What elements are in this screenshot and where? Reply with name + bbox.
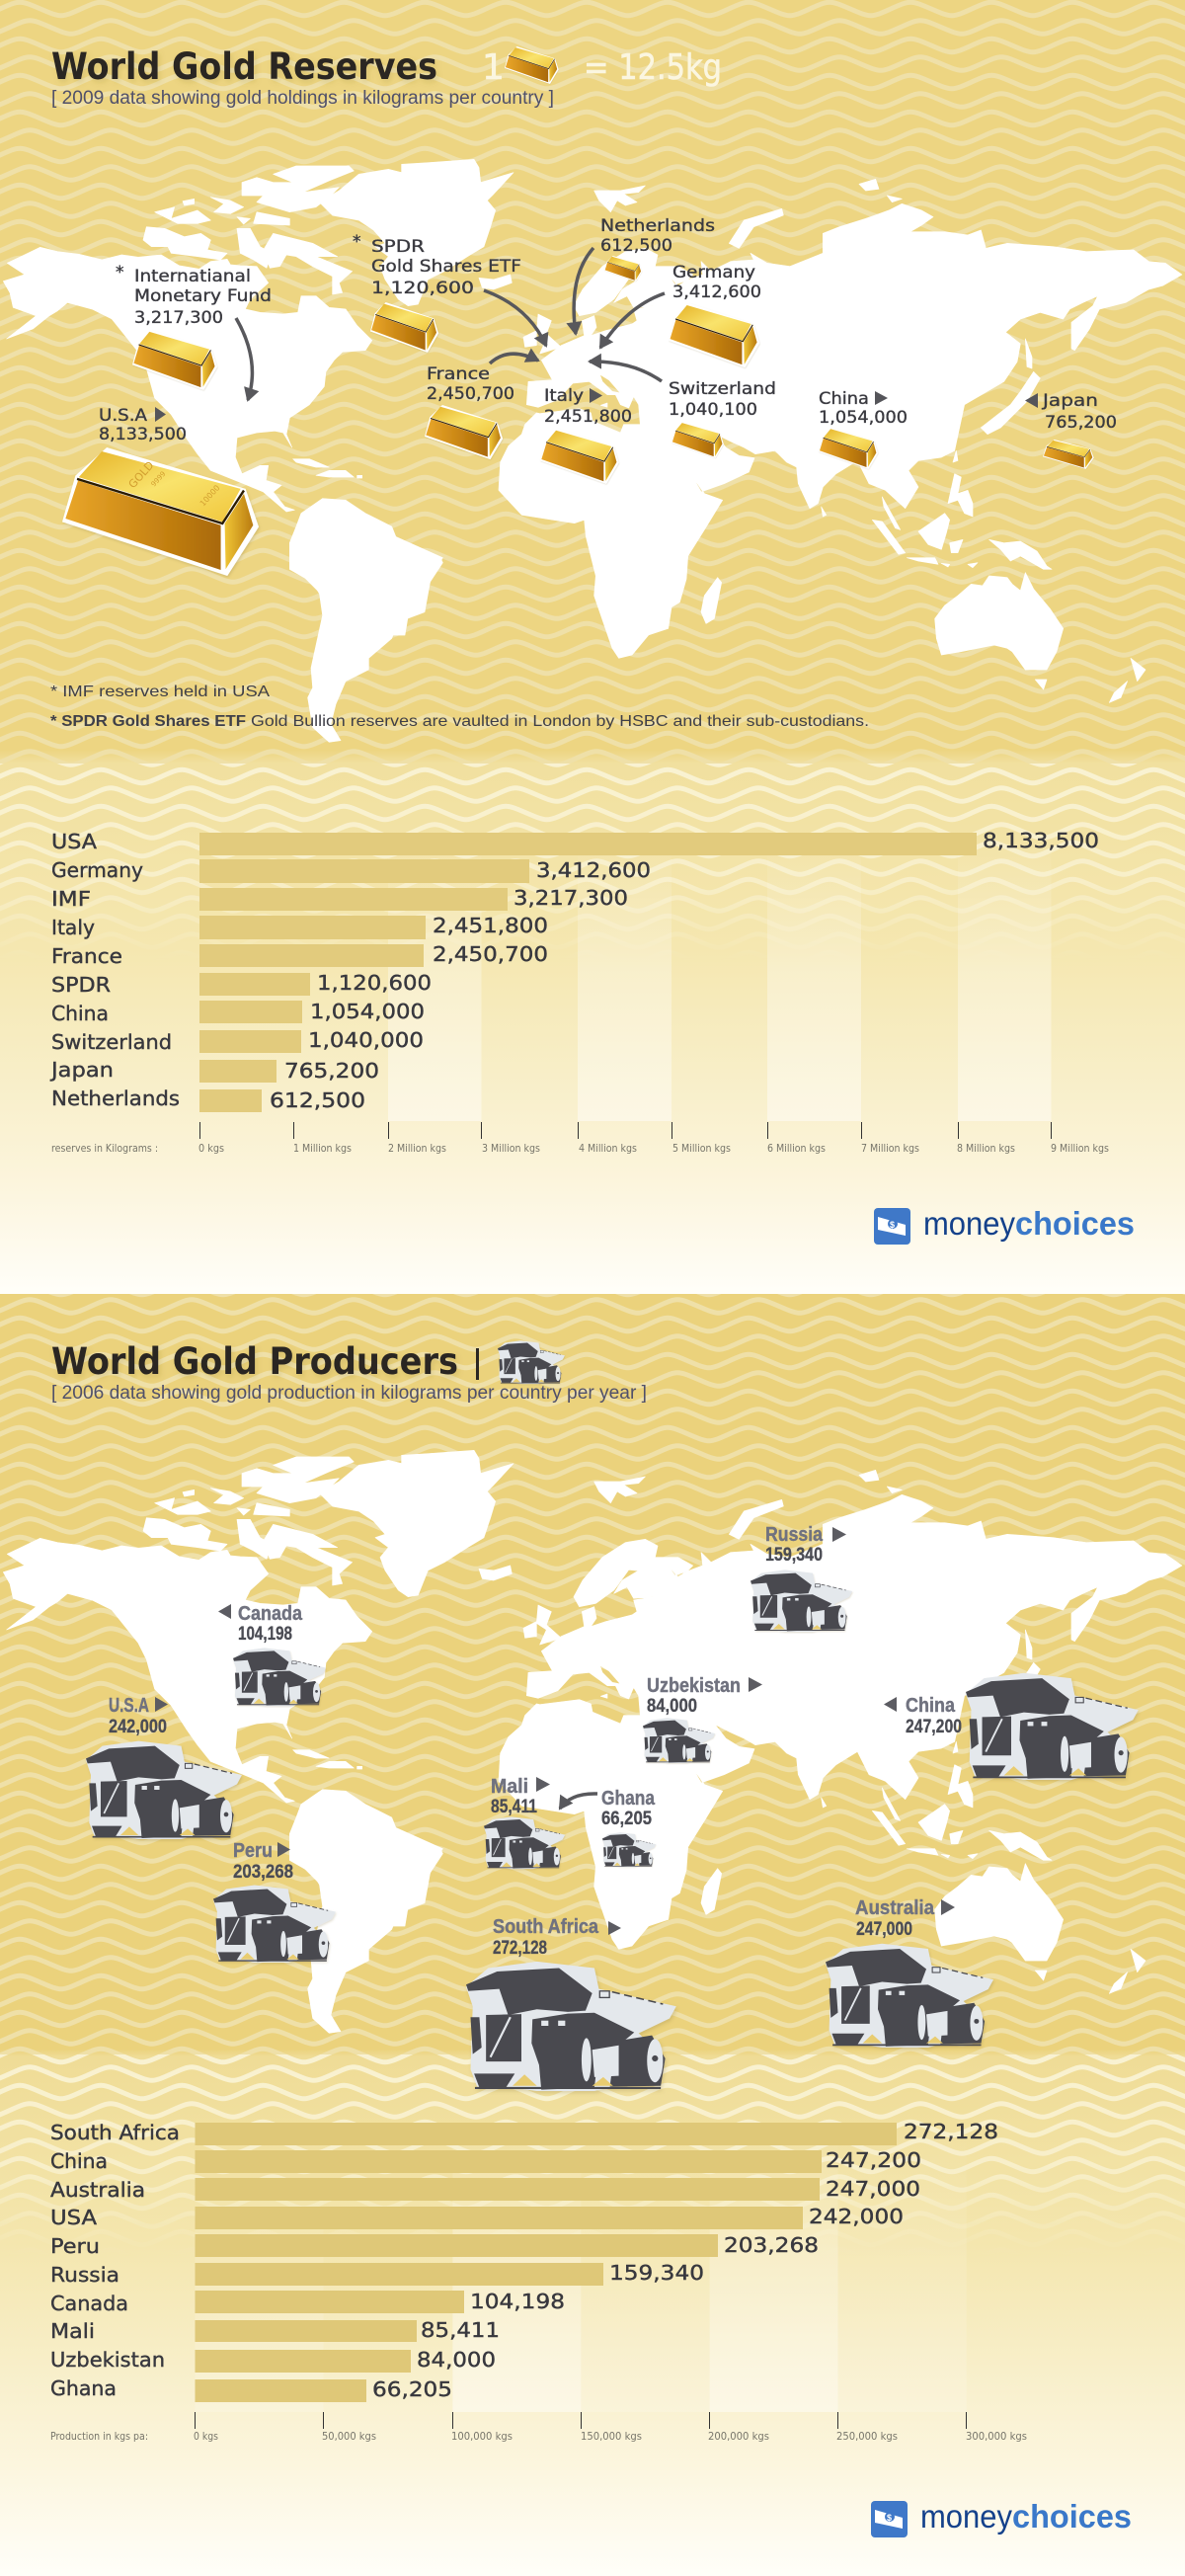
title: World Gold Reserves: World Gold Reserves (51, 45, 437, 88)
label: Ghana with truck and arrow (560, 1788, 656, 1867)
chart axis: reserves in Kilograms : (51, 1143, 158, 1155)
chart labels: Uzbekistan (50, 2348, 165, 2372)
footnotes (50, 684, 869, 730)
background: producers section (0, 1294, 1185, 2576)
chart values: 104,198 (470, 2290, 565, 2313)
label: Canada with truck: 104,198 (238, 1624, 292, 1645)
chart labels: Ghana (50, 2376, 117, 2400)
world map: reserves (3, 159, 1182, 742)
chart labels: Netherlands (51, 1087, 180, 1110)
chart labels: Switzerland (51, 1030, 172, 1054)
chart labels: USA (50, 2206, 97, 2229)
chart labels: Japan (49, 1058, 114, 1082)
key: one bar equals 12.5kg (482, 46, 722, 88)
chart values: 765,200 (284, 1059, 379, 1083)
key: one bar equals 12.5kg: = 12.5kg (584, 47, 722, 88)
arrows pointing to Europe and USA (236, 248, 665, 400)
label: France with gold bar: France (427, 364, 490, 384)
chart labels: Mali (50, 2319, 95, 2343)
chart labels: Peru (50, 2234, 100, 2258)
chart axis: 1 Million kgs (293, 1143, 352, 1155)
chart labels: Canada (50, 2292, 128, 2315)
chart axis (51, 1122, 1109, 1155)
label: Germany with gold bar (669, 263, 761, 367)
logo: moneychoices (producers): $ (887, 2513, 892, 2523)
footnotes: * IMF reserves held in USA (50, 684, 270, 700)
icon: title truck (498, 1340, 565, 1384)
chart values: 247,000 (826, 2177, 920, 2201)
label: Russia with truck (750, 1524, 852, 1632)
label: Peru with truck: Peru (233, 1840, 273, 1862)
chart axis: 100,000 kgs (451, 2431, 513, 2443)
title: World Gold Producers: World Gold Producers (51, 1340, 458, 1383)
chart labels: Russia (50, 2263, 119, 2287)
subtitle: reserves: [ 2009 data showing gold holdings in kilograms per country ] (51, 88, 554, 109)
label: Uzbekistan with truck: Uzbekistan (647, 1675, 741, 1697)
chart values: 84,000 (417, 2348, 496, 2372)
label: Netherlands with gold bar: 612,500 (600, 236, 672, 256)
label: South Africa with truck (466, 1916, 676, 2091)
label: Uzbekistan with truck: 84,000 (647, 1696, 697, 1717)
label: France with gold bar: 2,450,700 (427, 384, 514, 404)
logo: moneychoices: choices (1015, 1205, 1135, 1242)
key: one bar equals 12.5kg: 1 (482, 47, 505, 88)
label: International Monetary Fund with gold bar: * (116, 263, 124, 282)
chart values: 2,451,800 (433, 914, 548, 937)
footnotes: * SPDR Gold Shares ETF (50, 713, 246, 730)
chart labels: China (51, 1002, 109, 1025)
label: Canada with truck: Canada (238, 1603, 303, 1625)
chart values: 66,205 (372, 2377, 452, 2401)
label: USA with truck (86, 1695, 242, 1839)
chart axis: 2 Million kgs (388, 1143, 446, 1155)
background: reserves section (0, 0, 1185, 1294)
chart values (270, 829, 1099, 1112)
logo: moneychoices (producers): choices (1012, 2498, 1132, 2535)
logo: moneychoices (producers): money (920, 2498, 1012, 2535)
chart axis: 50,000 kgs (322, 2431, 376, 2443)
panel: world gold reserves map (3, 45, 1182, 742)
chart axis: 250,000 kgs (836, 2431, 898, 2443)
label: International Monetary Fund with gold bar (116, 263, 272, 390)
label: China with truck: China (906, 1695, 956, 1717)
chart values: 203,268 (724, 2233, 819, 2257)
chart axis: 300,000 kgs (966, 2431, 1027, 2443)
label: Ghana with truck and arrow: Ghana (601, 1788, 656, 1810)
bar chart: gold production (50, 2120, 1027, 2443)
chart axis: 6 Million kgs (767, 1143, 826, 1155)
chart axis: 9 Million kgs (1051, 1143, 1109, 1155)
label: USA with gold bar: 8,133,500 (99, 425, 187, 444)
chart labels: France (51, 944, 122, 968)
chart values: 3,412,600 (536, 858, 651, 882)
label: Russia with truck: Russia (765, 1524, 824, 1546)
label: Italy with gold bar (540, 386, 632, 484)
label: Netherlands with gold bar: Netherlands (600, 216, 715, 236)
chart values: 272,128 (904, 2120, 998, 2143)
world map: producers (3, 1450, 1182, 2033)
chart axis: 4 Million kgs (579, 1143, 637, 1155)
label: China with gold bar (819, 389, 908, 469)
chart values: 1,054,000 (310, 1000, 425, 1023)
chart values: 159,340 (609, 2261, 704, 2285)
chart axis: 7 Million kgs (861, 1143, 919, 1155)
chart axis: 0 kgs (194, 2431, 218, 2443)
label: Netherlands with gold bar (600, 216, 715, 282)
label: China with truck: 247,200 (906, 1717, 962, 1737)
label: Italy with gold bar: Italy (544, 386, 584, 406)
chart labels: China (50, 2149, 108, 2173)
chart values: 612,500 (270, 1088, 365, 1112)
label: Germany with gold bar: Germany (672, 263, 755, 282)
label: Canada with truck (218, 1603, 326, 1706)
chart axis: 200,000 kgs (708, 2431, 769, 2443)
label: China with gold bar: China (819, 389, 869, 409)
label: International Monetary Fund with gold bar: 3,217,300 (134, 308, 223, 328)
chart axis: 5 Million kgs (672, 1143, 731, 1155)
logo: moneychoices (producers) (871, 2498, 1132, 2537)
chart axis (50, 2412, 1027, 2443)
chart labels: Italy (51, 916, 95, 939)
chart values: 247,200 (826, 2148, 921, 2172)
label: USA with truck: 242,000 (109, 1717, 167, 1737)
chart values: 1,120,600 (317, 971, 432, 995)
label: Japan with gold bar (1025, 391, 1117, 469)
label: USA with gold bar: 9999 (150, 470, 167, 488)
label: China with truck (884, 1673, 1139, 1780)
label: Australia with truck (826, 1897, 993, 2048)
label: Ghana with truck and arrow: 66,205 (601, 1809, 652, 1829)
label: USA with truck: U.S.A (109, 1695, 149, 1717)
label: South Africa with truck: South Africa (493, 1916, 599, 1938)
label: SPDR with gold bar: SPDR (371, 237, 425, 257)
chart axis: 3 Million kgs (482, 1143, 540, 1155)
chart axis: 0 kgs (198, 1143, 224, 1155)
logo: moneychoices (874, 1205, 1135, 1245)
label: USA with gold bar (62, 406, 259, 576)
subtitle: producers: [ 2006 data showing gold production in kilograms per country per year ] (51, 1383, 647, 1404)
chart values: 242,000 (809, 2205, 904, 2228)
label: Japan with gold bar: Japan (1042, 391, 1098, 411)
chart labels: USA (51, 830, 97, 853)
label: Germany with gold bar: 3,412,600 (672, 282, 761, 302)
label: Switzerland with gold bar (669, 379, 776, 458)
chart values: 3,217,300 (514, 886, 628, 910)
label: Australia with truck: Australia (855, 1897, 935, 1919)
logo: moneychoices: money (923, 1205, 1015, 1242)
label: International Monetary Fund with gold bar: Internatianal (134, 267, 251, 286)
chart values: 2,450,700 (433, 942, 548, 966)
chart values (372, 2120, 998, 2401)
chart axis: 150,000 kgs (581, 2431, 642, 2443)
label: Mali with truck (484, 1776, 565, 1869)
label: China with gold bar: 1,054,000 (819, 408, 908, 428)
label: Peru with truck (213, 1840, 336, 1963)
label: France with gold bar (425, 364, 514, 459)
label: Italy with gold bar: 2,451,800 (544, 407, 632, 427)
chart labels: South Africa (50, 2121, 180, 2144)
label: Russia with truck: 159,340 (765, 1545, 823, 1566)
title divider (476, 1348, 479, 1380)
chart axis: 8 Million kgs (957, 1143, 1015, 1155)
logo: moneychoices: $ (890, 1220, 895, 1230)
chart labels: Australia (50, 2178, 145, 2202)
label: USA with gold bar: 10000 (198, 483, 222, 508)
chart labels (50, 2121, 180, 2400)
label: SPDR with gold bar (353, 232, 521, 353)
chart labels (49, 830, 180, 1110)
chart labels: SPDR (51, 973, 111, 997)
chart labels: IMF (51, 887, 91, 911)
label: Mali with truck: 85,411 (491, 1797, 537, 1817)
chart axis: Production in kgs pa: (50, 2431, 148, 2443)
label: Australia with truck: 247,000 (856, 1919, 912, 1940)
label: Peru with truck: 203,268 (233, 1862, 293, 1883)
chart values: 85,411 (421, 2318, 500, 2342)
label: Japan with gold bar: 765,200 (1045, 413, 1117, 433)
label: Switzerland with gold bar: Switzerland (669, 379, 776, 399)
label: Mali with truck: Mali (491, 1776, 528, 1798)
panel: world gold producers map (3, 1340, 1182, 2091)
bar chart: gold reserves (49, 829, 1109, 1155)
label: Switzerland with gold bar: 1,040,100 (669, 400, 757, 420)
label: SPDR with gold bar: Gold Shares ETF (371, 257, 521, 277)
footnotes: Gold Bullion reserves are vaulted in London by HSBC and their sub-custodians. (251, 713, 869, 730)
label: Uzbekistan with truck (643, 1675, 762, 1763)
label: SPDR with gold bar: 1,120,600 (371, 279, 474, 298)
chart values: 1,040,000 (308, 1028, 424, 1052)
label: SPDR with gold bar: * (353, 232, 361, 252)
label: South Africa with truck: 272,128 (493, 1938, 547, 1959)
label: USA with gold bar: U.S.A (99, 406, 147, 426)
label: USA with gold bar: GOLD (126, 459, 156, 491)
chart labels: Germany (51, 858, 143, 882)
chart values: 8,133,500 (983, 829, 1099, 852)
label: International Monetary Fund with gold bar: Monetary Fund (134, 286, 272, 306)
